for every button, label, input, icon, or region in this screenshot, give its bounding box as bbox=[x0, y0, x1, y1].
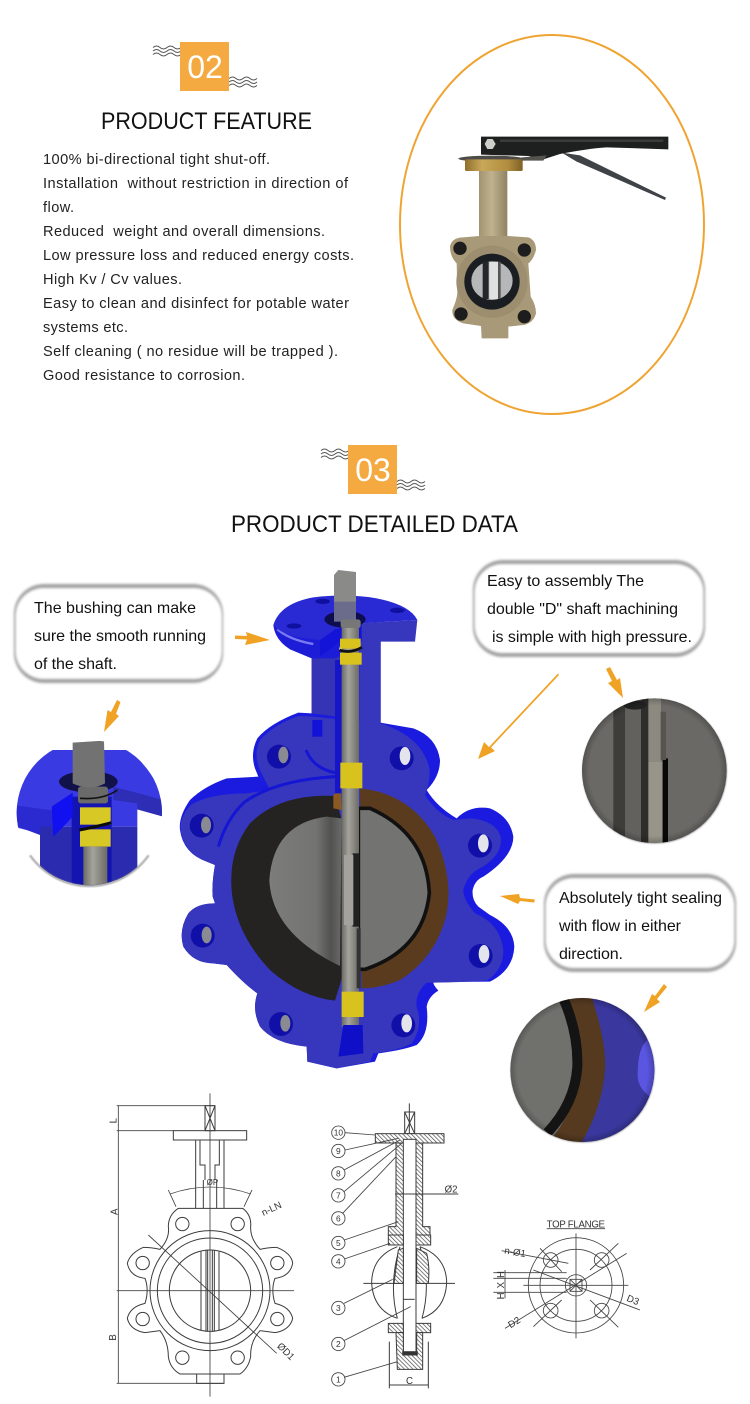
callout: double D shaft: double "D" shaft machining bbox=[487, 601, 678, 618]
detail circle: sealing bbox=[510, 997, 657, 1147]
dimension labels bbox=[406, 1185, 458, 1387]
flange right side bbox=[113, 787, 163, 817]
ring bbox=[79, 823, 111, 830]
collar bbox=[78, 787, 108, 803]
top notch bbox=[623, 700, 647, 710]
shaft lower bbox=[83, 847, 107, 887]
left black seat liner bbox=[231, 796, 343, 1001]
o-ring top bbox=[80, 790, 117, 799]
yellow bushings bbox=[80, 807, 111, 825]
arrow: bushing callout to detail bbox=[104, 700, 120, 732]
bolt holes bbox=[136, 1217, 284, 1364]
dimension labels bbox=[108, 1117, 296, 1363]
arrow: long to valve body bbox=[478, 674, 559, 759]
numbered parts bbox=[332, 1126, 411, 1386]
neck wall right bbox=[359, 640, 381, 723]
part numbers: 7 bbox=[336, 1190, 341, 1200]
text block: feature list: 100% bi-directional tight shut-off. bbox=[43, 152, 270, 168]
dimension labels: ØP bbox=[207, 1178, 218, 1187]
text block: feature list: Installation without restriction in direction of bbox=[43, 176, 349, 192]
dimension labels: ØD1 bbox=[275, 1341, 296, 1363]
blue wedge highlight bbox=[52, 793, 73, 837]
top flange view: HXH bbox=[496, 1271, 507, 1299]
arrow: sealing callout to detail bbox=[644, 984, 667, 1012]
callout: tight sealing: direction. bbox=[559, 946, 623, 963]
flange front left bbox=[16, 806, 53, 835]
part numbers: 8 bbox=[336, 1168, 341, 1178]
text block: feature list: Good resistance to corrosion. bbox=[43, 368, 245, 384]
top flange view: n-Ø1 bbox=[503, 1245, 527, 1260]
cutaway valve illustration bbox=[180, 570, 514, 1068]
callout: tight sealing: Absolutely tight sealing bbox=[559, 890, 722, 907]
neck wall bbox=[312, 657, 342, 790]
callout: bushing bbox=[14, 584, 223, 683]
callout: double D shaft: Easy to assembly The bbox=[487, 573, 644, 590]
orange oval frame bbox=[400, 35, 704, 414]
part numbers: 6 bbox=[336, 1213, 341, 1223]
disc left half bbox=[269, 817, 342, 966]
top flange view: D3 bbox=[625, 1293, 640, 1308]
heading: product detailed data: PRODUCT DETAILED DATA bbox=[231, 511, 519, 538]
section body bbox=[363, 1103, 458, 1388]
disc right half bbox=[358, 808, 429, 969]
callout: tight sealing: with flow in either bbox=[558, 918, 682, 935]
disc shading bbox=[613, 697, 625, 843]
part numbers bbox=[334, 1128, 343, 1384]
part numbers: 3 bbox=[336, 1303, 341, 1313]
callout: bushing: sure the smooth running bbox=[34, 628, 206, 645]
body silhouette bbox=[180, 640, 514, 1068]
lever spring arm bbox=[562, 153, 666, 200]
part numbers: 5 bbox=[336, 1238, 341, 1248]
text block: feature list bbox=[43, 152, 354, 384]
badge: 03 bbox=[321, 445, 425, 494]
brown seat sliver bbox=[333, 789, 342, 810]
part numbers: 9 bbox=[336, 1146, 341, 1156]
center lines and dimension lines bbox=[117, 1093, 294, 1397]
dimension labels: n-LN bbox=[260, 1200, 284, 1219]
handle bolt bbox=[485, 139, 496, 149]
text block: feature list: High Kv / Cv values. bbox=[43, 272, 182, 288]
part numbers: 2 bbox=[336, 1339, 341, 1349]
bottom stub bbox=[197, 1374, 224, 1383]
top flange view: D2 bbox=[506, 1315, 523, 1331]
top flange view bbox=[493, 1219, 640, 1338]
bolt holes bbox=[453, 242, 531, 323]
disc bbox=[201, 1250, 219, 1332]
top flange bbox=[273, 596, 417, 658]
top flange view: TOP FLANGE bbox=[547, 1219, 606, 1230]
dimension labels: A bbox=[109, 1208, 120, 1215]
shaft lower bbox=[648, 762, 662, 843]
neck bbox=[40, 827, 137, 887]
body outline bbox=[127, 1208, 293, 1374]
drawing: section view with numbered parts bbox=[332, 1103, 640, 1388]
dimension labels: Ø2 bbox=[445, 1185, 458, 1196]
callout: double D shaft: is simple with high pressure. bbox=[492, 629, 692, 646]
dimension labels: L bbox=[108, 1117, 119, 1123]
text block: feature list: Self cleaning ( no residue will be trapped ). bbox=[43, 344, 338, 360]
arrow: sealing to valve bbox=[500, 894, 535, 904]
dimension labels: B bbox=[108, 1334, 119, 1341]
handle bbox=[481, 137, 668, 159]
bore and disc bbox=[456, 246, 528, 318]
text block: feature list: Low pressure loss and reduced energy costs. bbox=[43, 248, 354, 264]
right brown seat liner bbox=[360, 788, 448, 988]
arrow: shaft callout to detail bbox=[606, 667, 623, 698]
part numbers: 1 bbox=[336, 1374, 341, 1384]
lower shaft end bbox=[338, 1025, 363, 1057]
body face bbox=[181, 716, 503, 1068]
detail circle: double D shaft bbox=[582, 697, 727, 843]
callout: tight sealing bbox=[544, 874, 736, 972]
dimension labels: C bbox=[406, 1376, 413, 1387]
black seat edge bbox=[547, 1000, 577, 1133]
yellow bushings bbox=[340, 639, 364, 1017]
stem bbox=[73, 741, 105, 787]
shaft upper bbox=[648, 697, 661, 762]
callout: bushing: of the shaft. bbox=[34, 656, 117, 673]
arrow: bushing to valve bbox=[235, 632, 270, 645]
rim highlights bbox=[218, 750, 335, 847]
flange bbox=[458, 155, 547, 171]
neck bbox=[479, 171, 507, 239]
drawing: front view dimensions bbox=[108, 1093, 296, 1397]
part numbers: 4 bbox=[336, 1256, 341, 1266]
brown seat bbox=[553, 997, 605, 1145]
text block: feature list: flow. bbox=[43, 200, 74, 216]
bore bbox=[59, 771, 118, 792]
lower rim shadow bbox=[30, 855, 149, 886]
text block: feature list: systems etc. bbox=[43, 320, 128, 336]
detail circle: bushing bbox=[13, 740, 163, 887]
callout: double D shaft bbox=[473, 560, 705, 657]
text block: feature list: Reduced weight and overall dimensions. bbox=[43, 224, 325, 240]
bolt holes bbox=[190, 745, 493, 1037]
badge: 02: 02 bbox=[187, 49, 223, 85]
shaft flat shadow bbox=[663, 758, 668, 843]
blue body bbox=[578, 997, 657, 1147]
flange top bbox=[13, 750, 163, 833]
bright lug bbox=[638, 1040, 654, 1096]
o-ring bbox=[339, 647, 362, 651]
part numbers: 10 bbox=[334, 1128, 343, 1138]
neck inner cut bbox=[335, 660, 342, 793]
badge: 02 bbox=[153, 42, 257, 91]
badge: 03: 03 bbox=[355, 452, 391, 488]
text block: feature list: Easy to clean and disinfect for potable water bbox=[43, 296, 349, 312]
product photo: bronze lug valve with lever bbox=[450, 137, 668, 338]
shaft bbox=[334, 570, 361, 1027]
callout: bushing: The bushing can make bbox=[34, 600, 196, 617]
body bbox=[450, 236, 536, 338]
neck shadow block bbox=[312, 720, 322, 737]
heading: product feature: PRODUCT FEATURE bbox=[101, 108, 312, 135]
stem and flange bbox=[173, 1106, 247, 1208]
concentric rings bbox=[150, 1231, 270, 1351]
